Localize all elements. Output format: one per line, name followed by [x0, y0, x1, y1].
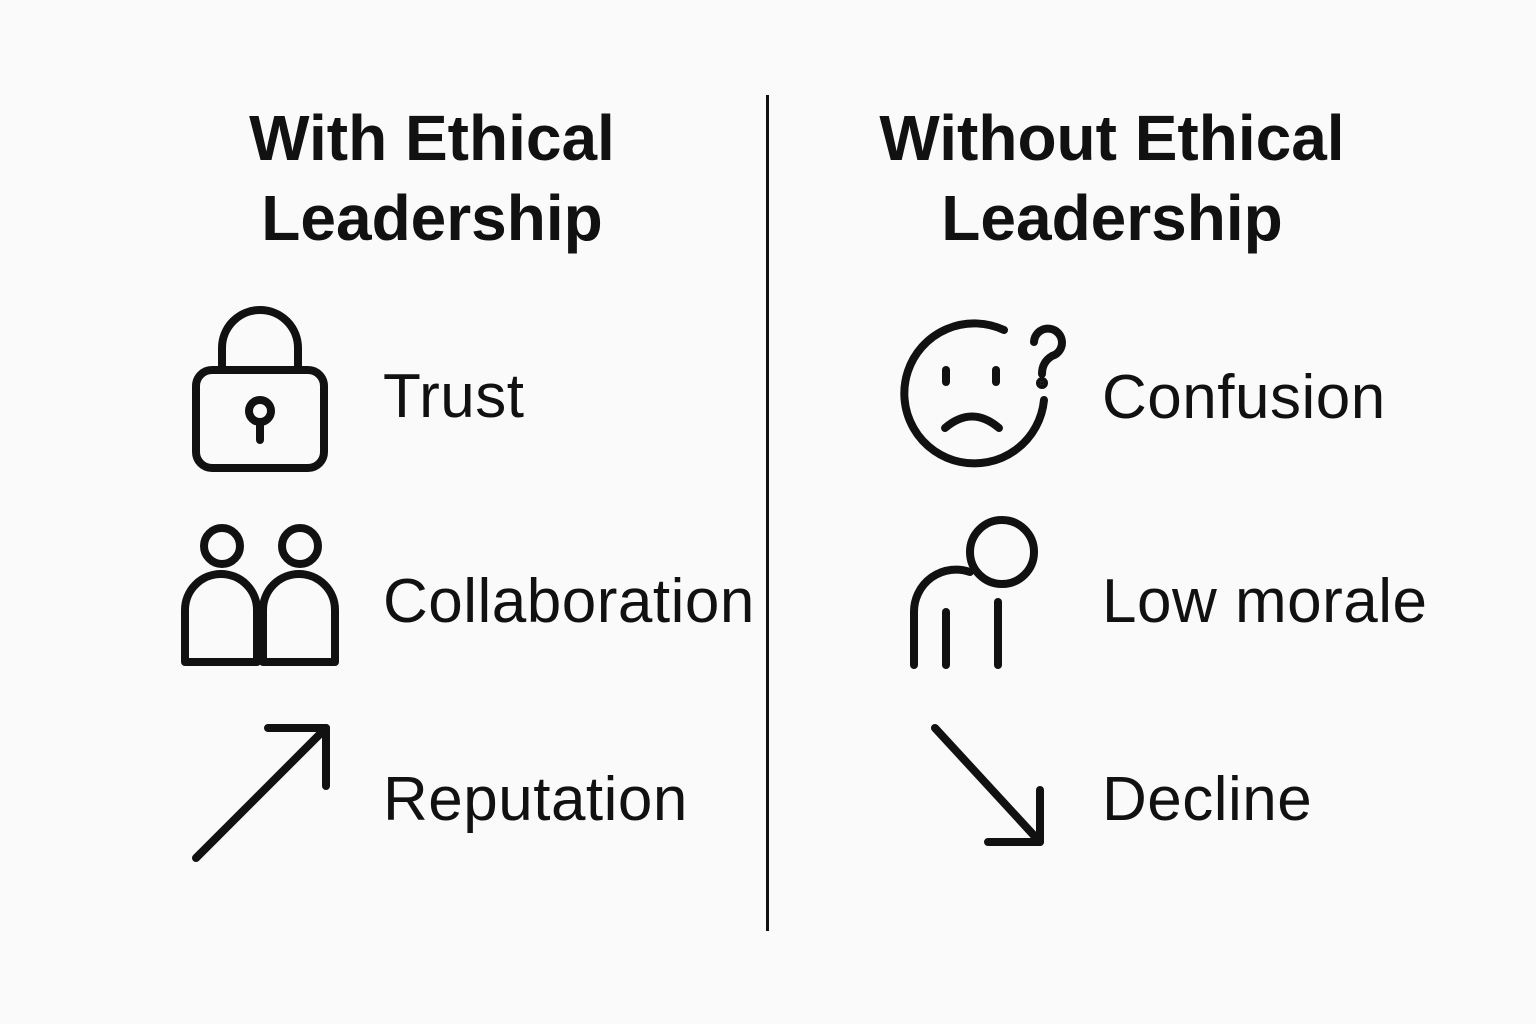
- label: decline: Decline: [1102, 765, 1312, 834]
- icon: arrow down: [935, 728, 1040, 842]
- icon: slumped person: [914, 520, 1034, 665]
- label: reputation: Reputation: [383, 765, 688, 834]
- icon: arrow up: [196, 728, 326, 858]
- divider: [766, 95, 769, 931]
- icon: people: [185, 528, 335, 662]
- label: low morale: Low morale: [1102, 567, 1427, 636]
- label: collaboration: Collaboration: [383, 567, 755, 636]
- icon: confused face: [904, 323, 1062, 463]
- title: without ethical leadership: Leadership: [941, 182, 1283, 254]
- title: without ethical leadership: [879, 102, 1345, 254]
- title: without ethical leadership: Without Ethical: [879, 102, 1345, 174]
- label: trust: Trust: [383, 362, 524, 431]
- title: with ethical leadership: With Ethical: [249, 102, 615, 174]
- title: with ethical leadership: [249, 102, 615, 254]
- icon: lock: [196, 310, 324, 468]
- title: with ethical leadership: Leadership: [261, 182, 603, 254]
- label: confusion: Confusion: [1102, 363, 1386, 432]
